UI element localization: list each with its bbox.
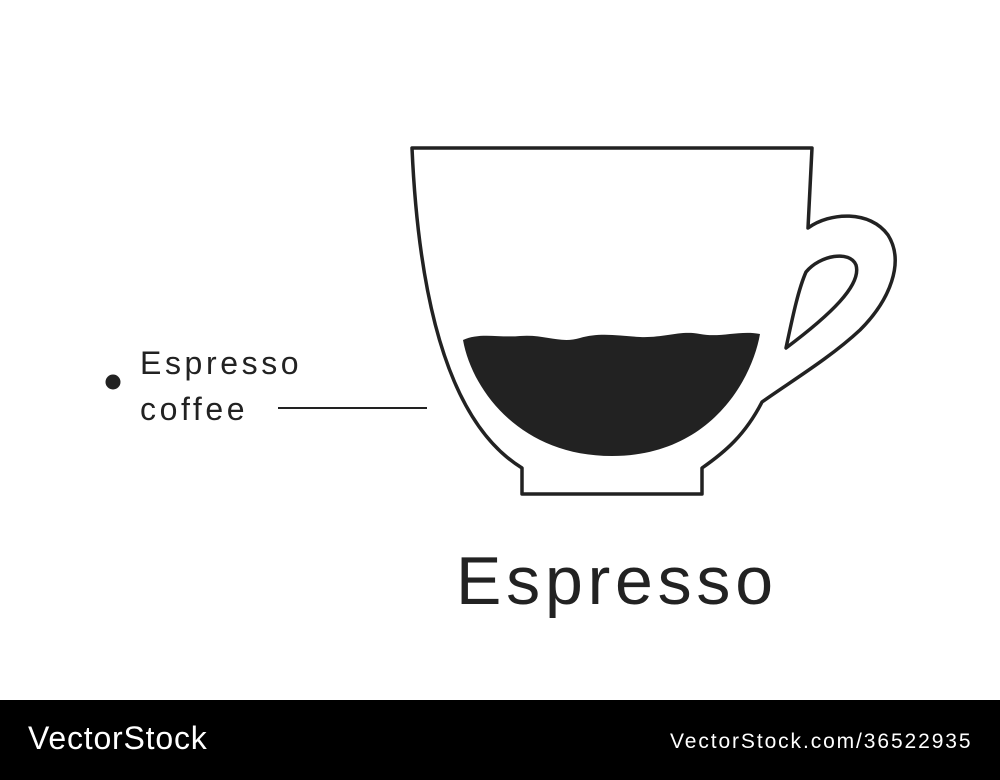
bullet dot xyxy=(106,374,120,390)
title: Espresso: Espresso xyxy=(456,543,778,619)
footer logo: VectorStock xyxy=(28,720,208,756)
label: espresso coffee xyxy=(140,345,302,427)
label: espresso coffee: coffee xyxy=(140,391,248,427)
coffee liquid xyxy=(463,333,760,456)
footer bar xyxy=(0,700,1000,780)
label: espresso coffee: Espresso xyxy=(140,345,302,381)
footer url: VectorStock.com/36522935 xyxy=(670,730,972,753)
cup outline xyxy=(412,148,895,494)
label connector line xyxy=(278,407,427,409)
